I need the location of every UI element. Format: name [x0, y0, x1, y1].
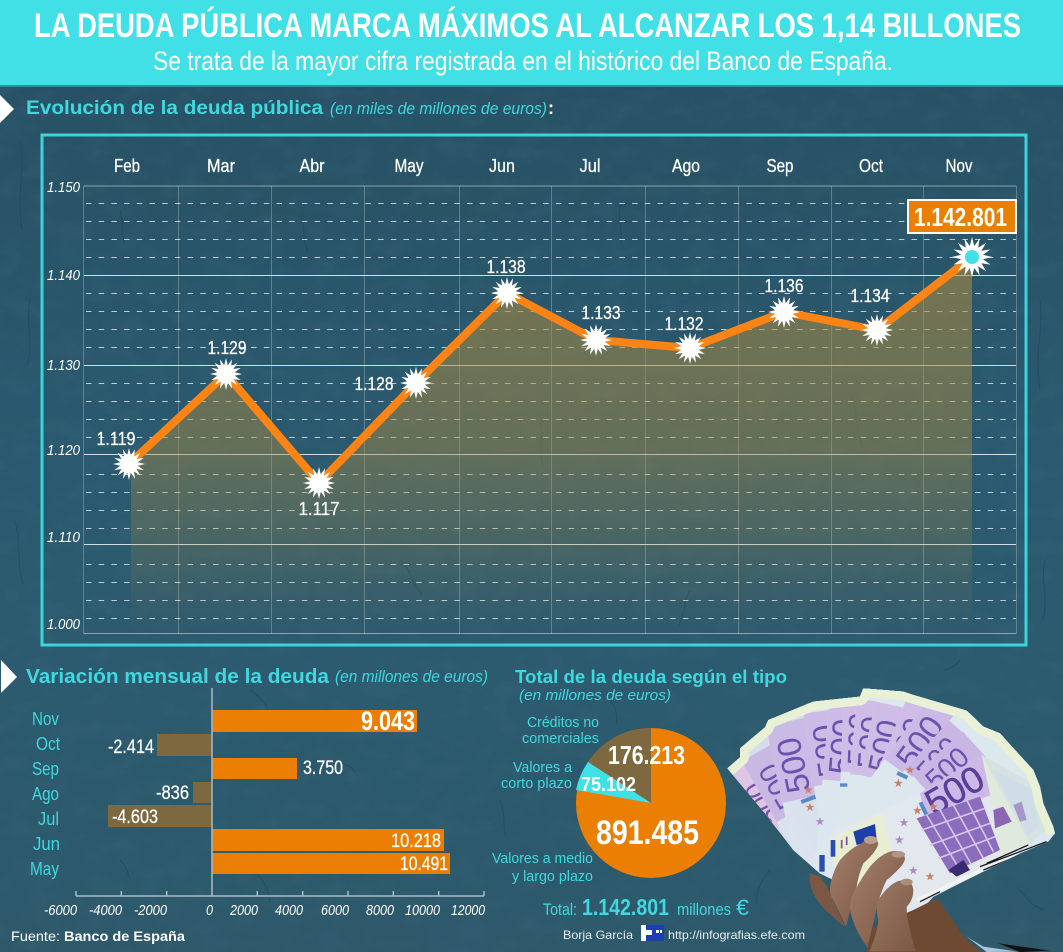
heading: total de la deuda — [515, 667, 787, 704]
y axis labels: 1.140 — [47, 268, 80, 284]
source — [11, 929, 186, 944]
month labels: Feb — [114, 156, 140, 176]
right stack of notes — [982, 755, 1047, 845]
y axis labels: 1.110 — [47, 530, 80, 546]
pie values: 75.102 — [581, 774, 636, 796]
slice: créditos no comerciales — [588, 728, 651, 803]
header banner — [0, 0, 1063, 87]
month labels: Jun — [489, 156, 515, 176]
illustration: hand holding fan of 500 euro notes: 500 — [822, 717, 864, 776]
slice: valores a corto plazo — [576, 762, 651, 803]
data labels: 1.117 — [298, 499, 340, 519]
heading: variación mensual: Variación mensual de la deuda — [26, 666, 330, 688]
y axis labels: 1.150 — [47, 180, 80, 196]
y axis labels: 1.130 — [47, 358, 80, 374]
illustration: hand holding fan of 500 euro notes: 500 — [850, 715, 891, 771]
x axis labels: 10000 — [405, 903, 440, 919]
bar month labels: Oct — [36, 733, 60, 754]
pie chart: debt by type — [492, 714, 726, 885]
month labels: Nov — [946, 156, 972, 176]
x axis labels: 2000 — [229, 903, 258, 919]
data point markers — [113, 237, 992, 499]
month labels: Oct — [859, 156, 883, 176]
heading: evolución de la deuda pública — [26, 98, 554, 119]
x axis labels: 4000 — [275, 903, 303, 919]
credits — [563, 925, 805, 942]
total line: 1.142.801 — [582, 894, 669, 920]
x axis labels: -6000 — [44, 903, 77, 919]
zero axis and scale — [76, 688, 484, 896]
bar month labels: Jul — [38, 808, 59, 829]
panel: line chart — [42, 135, 1026, 645]
bar values: -836 — [156, 783, 189, 804]
credits: Borja García — [563, 928, 633, 942]
bar values: -4.603 — [112, 807, 158, 828]
heading: evolución de la deuda pública: : — [548, 98, 554, 118]
icon: section arrow 2 — [1, 660, 17, 693]
illustration: hand holding fan of 500 euro notes — [727, 688, 1055, 952]
area under line — [131, 257, 972, 634]
subtitle: Se trata de la mayor cifra registrada en el histórico del Banco de España. — [153, 46, 893, 76]
bar month labels: Ago — [32, 783, 59, 804]
pie labels: y largo plazo — [512, 868, 593, 885]
month labels: Ago — [672, 156, 700, 176]
illustration: hand holding fan of 500 euro notes: 500 — [840, 712, 878, 766]
pie labels — [492, 714, 599, 885]
bar values: 9.043 — [361, 706, 415, 736]
bar month labels: Nov — [32, 708, 60, 729]
heading: total de la deuda: Total de la deuda según el tipo — [515, 667, 787, 687]
data labels: 1.128 — [354, 374, 394, 394]
month labels: Mar — [207, 156, 235, 176]
bars — [108, 710, 450, 874]
x axis labels: -4000 — [89, 903, 122, 919]
bar chart: monthly variation — [30, 688, 485, 919]
illustration: hand holding fan of 500 euro notes: 500 — [910, 731, 966, 788]
icon: efe logo — [641, 925, 664, 941]
cream outer rim of the notes — [727, 688, 1055, 833]
x axis labels: 8000 — [366, 903, 394, 919]
pie values: 891.485 — [596, 814, 699, 852]
month labels: Abr — [300, 156, 325, 176]
data labels: 1.132 — [664, 314, 704, 334]
pie labels: Valores a — [513, 759, 573, 776]
small note with flag — [828, 814, 892, 884]
source: Fuente: — [11, 929, 60, 944]
bar month labels: May — [30, 858, 60, 879]
x axis labels: -2000 — [134, 903, 167, 919]
total line: Total: — [543, 900, 577, 919]
bar values: 3.750 — [303, 758, 343, 779]
x axis labels: 0 — [206, 903, 213, 919]
x axis labels: 6000 — [321, 903, 349, 919]
heading: total de la deuda: (en millones de euros) — [519, 687, 671, 704]
heading: variación mensual — [26, 666, 488, 688]
illustration: hand holding fan of 500 euro notes: 500 — [889, 709, 952, 776]
bar month labels — [30, 708, 60, 879]
pie labels: Créditos no — [527, 714, 599, 731]
bar values: 10.491 — [400, 854, 448, 875]
pie labels: corto plazo — [501, 775, 572, 792]
pie values — [581, 740, 699, 852]
bar month labels: Sep — [32, 758, 59, 779]
illustration: hand holding fan of 500 euro notes: 500 — [753, 758, 804, 814]
illustration: hand holding fan of 500 euro notes: 500 — [805, 722, 848, 780]
line series — [129, 257, 972, 483]
heading: variación mensual: (en millones de euros) — [335, 667, 488, 686]
month labels: Jul — [580, 156, 600, 176]
data labels: 1.134 — [850, 286, 890, 306]
illustration: hand holding fan of 500 euro notes: 500 — [861, 717, 907, 776]
y axis labels: 1.120 — [47, 443, 80, 459]
source: Banco de España — [64, 929, 186, 944]
heading: evolución de la deuda pública: Evolución de la deuda pública — [26, 98, 323, 119]
x axis labels: 12000 — [451, 903, 485, 919]
data labels: 1.129 — [208, 338, 246, 358]
credits: http://infografias.efe.com — [668, 928, 805, 942]
illustration: hand holding fan of 500 euro notes: 500 — [918, 758, 991, 824]
callout: november value: 1.142.801 — [914, 202, 1007, 232]
data labels: 1.138 — [486, 257, 526, 277]
illustration: hand holding fan of 500 euro notes: 500 — [739, 777, 786, 830]
bar month labels: Jun — [33, 833, 60, 854]
pie labels: Valores a medio — [492, 850, 593, 867]
x axis labels — [44, 903, 485, 919]
hand — [810, 836, 1050, 952]
data labels: 1.119 — [96, 429, 136, 449]
illustration: hand holding fan of 500 euro notes: 500 — [770, 734, 818, 796]
bar values — [108, 706, 448, 875]
total line — [543, 894, 749, 920]
total line: € — [736, 895, 749, 920]
heading: evolución de la deuda pública: (en miles de millones de euros) — [330, 99, 547, 118]
illustration: hand holding fan of 500 euro notes: 500 — [880, 713, 934, 775]
total line: millones — [677, 900, 731, 919]
illustration: hand holding fan of 500 euro notes: 500 — [919, 741, 976, 797]
bar values: -2.414 — [108, 737, 154, 758]
icon: section arrow 1 — [0, 95, 14, 123]
pie values: 176.213 — [608, 740, 685, 770]
y axis labels: 1.000 — [47, 617, 80, 633]
y axis labels — [47, 180, 80, 633]
data labels: 1.133 — [582, 303, 620, 323]
front note — [926, 755, 982, 790]
pie labels: comerciales — [522, 730, 599, 747]
data labels: 1.136 — [764, 276, 804, 296]
month labels: May — [394, 156, 424, 176]
data labels — [96, 257, 890, 519]
month labels — [114, 156, 972, 176]
bar values: 10.218 — [391, 831, 441, 852]
month labels: Sep — [766, 156, 794, 176]
